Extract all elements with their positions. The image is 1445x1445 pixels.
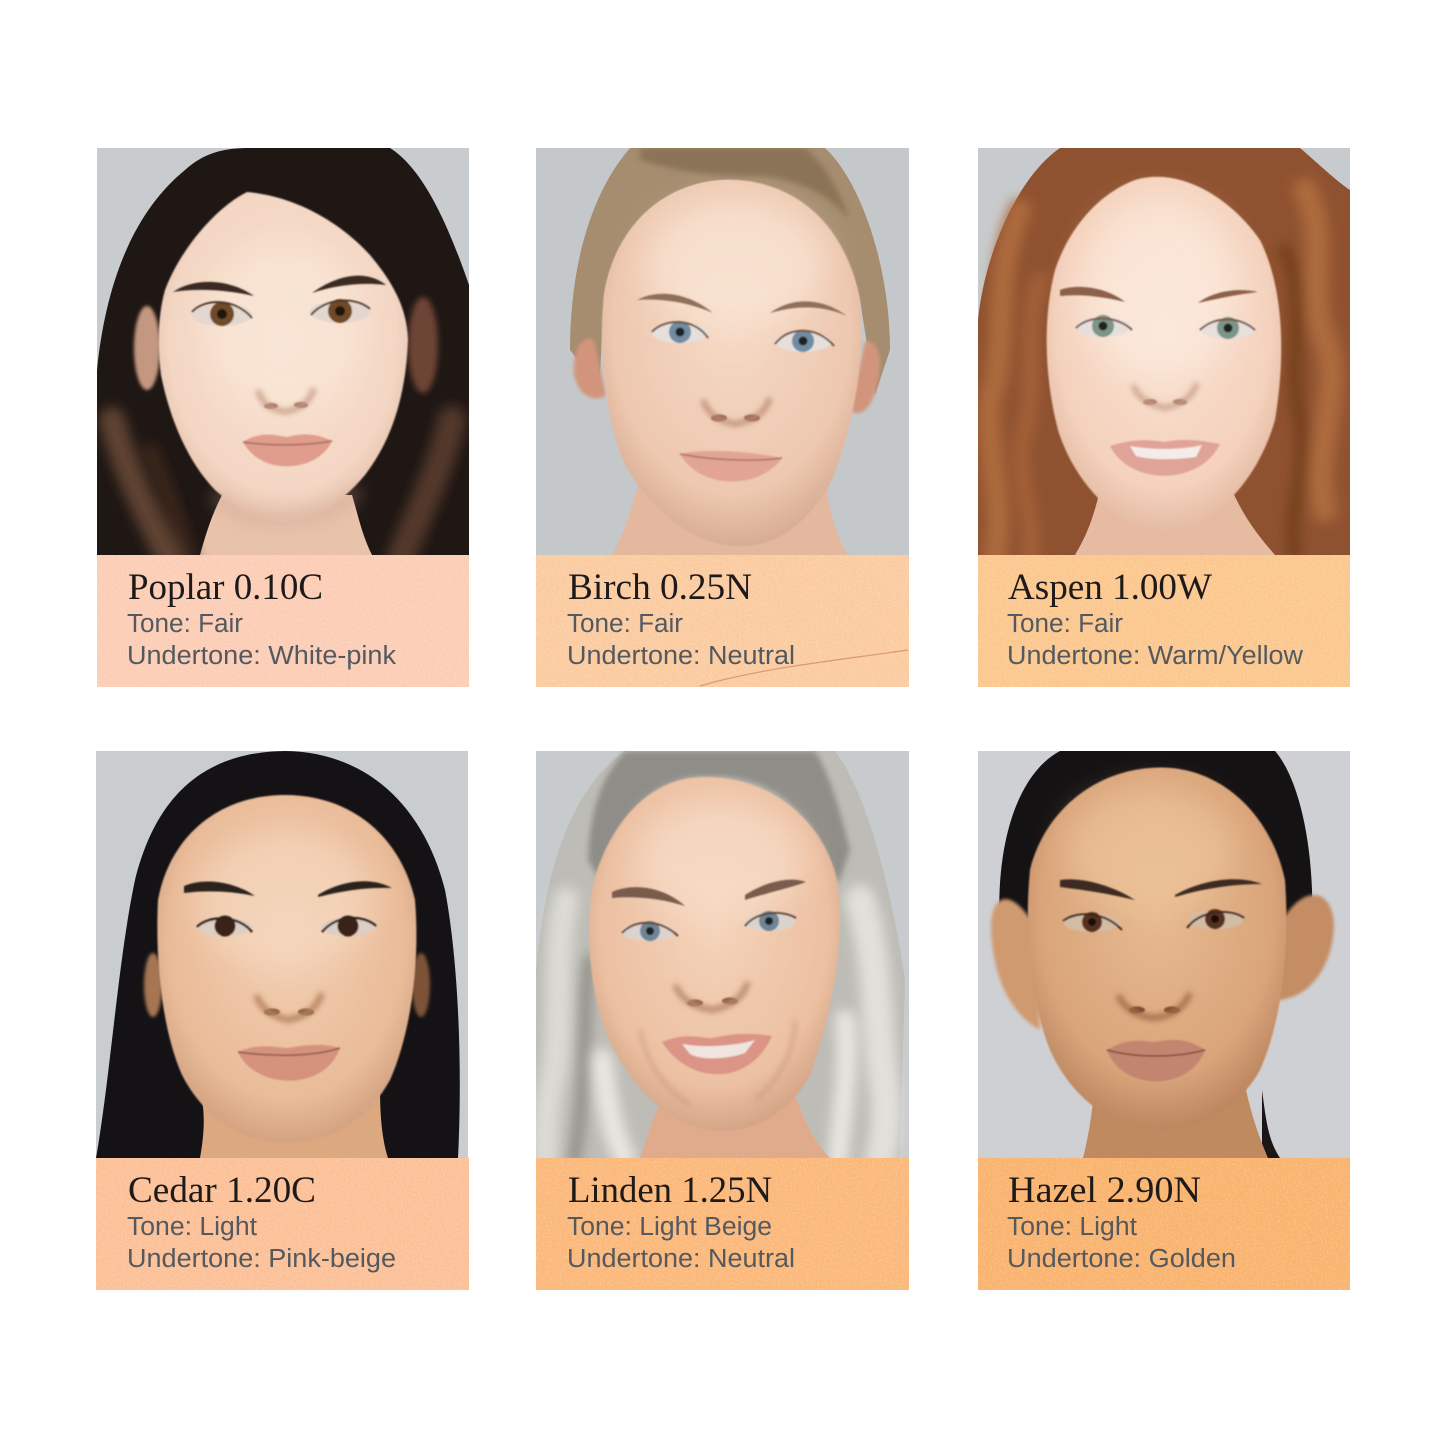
swatch: Cedar bbox=[96, 1158, 469, 1290]
swatch: Aspen bbox=[978, 555, 1350, 687]
panel: Linden 1.25N bbox=[536, 751, 909, 1290]
portrait: Hazel model bbox=[978, 751, 1350, 1158]
tone: Tone: Fair bbox=[127, 610, 244, 638]
shade name: Cedar 1.20C bbox=[128, 1170, 316, 1211]
portrait: Linden model bbox=[536, 751, 909, 1160]
panel: Poplar 0.10C bbox=[97, 148, 469, 687]
shade name: Birch 0.25N bbox=[568, 567, 752, 608]
tone: Tone: Fair bbox=[1007, 610, 1124, 638]
panel: Hazel 2.90N bbox=[978, 751, 1350, 1290]
undertone: Undertone: Neutral bbox=[567, 1245, 795, 1273]
swatch: Linden bbox=[536, 1158, 909, 1290]
portrait: Poplar model bbox=[97, 148, 469, 560]
tone: Tone: Fair bbox=[567, 610, 684, 638]
tone: Tone: Light Beige bbox=[567, 1213, 772, 1241]
swatch: Hazel bbox=[978, 1158, 1350, 1290]
undertone: Undertone: Warm/Yellow bbox=[1007, 642, 1304, 670]
undertone: Undertone: White-pink bbox=[127, 642, 396, 670]
swatch: Birch bbox=[536, 555, 909, 687]
portrait: Aspen model bbox=[978, 148, 1350, 555]
shade name: Linden 1.25N bbox=[568, 1170, 772, 1211]
undertone: Undertone: Neutral bbox=[567, 642, 795, 670]
portrait: Birch model bbox=[536, 148, 909, 555]
undertone: Undertone: Golden bbox=[1007, 1245, 1236, 1273]
portrait: Cedar model bbox=[96, 751, 468, 1158]
panel: Birch 0.25N bbox=[536, 148, 909, 687]
shade name: Poplar 0.10C bbox=[128, 567, 323, 608]
shade name: Aspen 1.00W bbox=[1008, 567, 1212, 608]
tone: Tone: Light bbox=[1007, 1213, 1137, 1241]
tone: Tone: Light bbox=[127, 1213, 257, 1241]
undertone: Undertone: Pink-beige bbox=[127, 1245, 396, 1273]
panel: Aspen 1.00W bbox=[978, 148, 1350, 687]
shade name: Hazel 2.90N bbox=[1008, 1170, 1201, 1211]
panel: Cedar 1.20C bbox=[96, 751, 469, 1290]
swatch: Poplar bbox=[97, 555, 469, 687]
